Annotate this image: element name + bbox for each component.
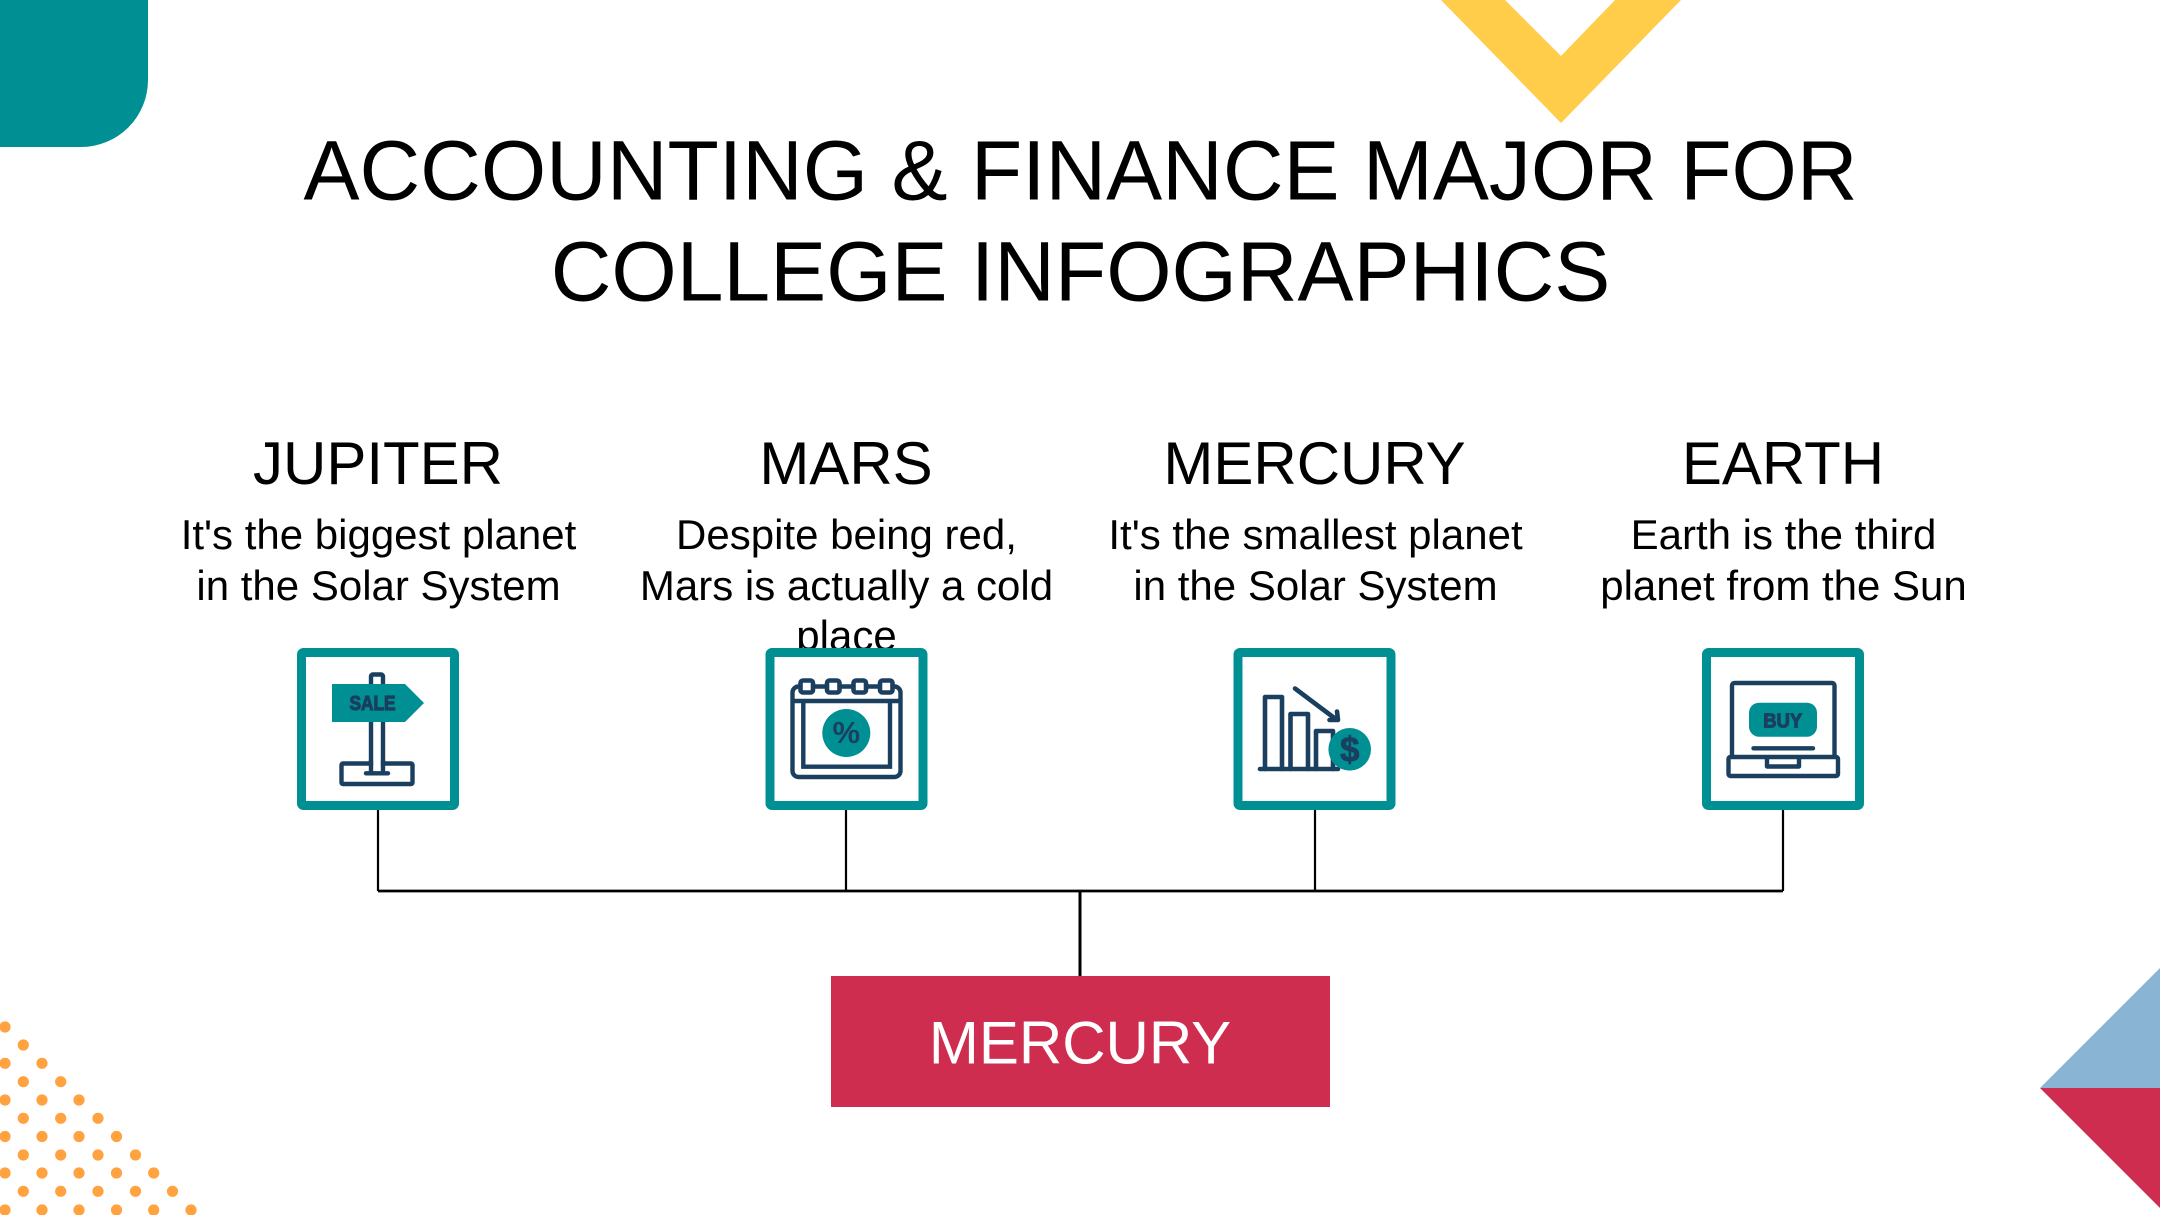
- decoration: orange dot triangle: [0, 1021, 197, 1215]
- text: Earth description: Earth is the third: [1631, 511, 1936, 558]
- icon: sale sign: SALE: [350, 693, 396, 715]
- text: Mercury description: [1108, 511, 1523, 609]
- icon: falling chart with dollar: [1238, 652, 1391, 806]
- heading: Jupiter: JUPITER: [253, 430, 503, 497]
- decoration: blue and red triangles: [2040, 968, 2160, 1208]
- panel: Jupiter: [181, 430, 577, 806]
- panel: Mars: [640, 430, 1053, 806]
- text: Jupiter description: It's the biggest planet: [181, 511, 577, 558]
- text: Mars description: place: [796, 612, 897, 659]
- icon: percent calendar: %: [833, 715, 860, 750]
- title: ACCOUNTING & FINANCE MAJOR FOR: [303, 124, 1858, 218]
- heading: Earth: EARTH: [1682, 430, 1884, 497]
- heading: Mercury: MERCURY: [1163, 430, 1466, 497]
- text: Mars description: Despite being red,: [676, 511, 1017, 558]
- text: Earth description: [1600, 511, 1967, 609]
- icon: falling chart with dollar: $: [1340, 730, 1359, 770]
- text: Mars description: Mars is actually a cold: [640, 562, 1053, 609]
- connector lines: [378, 808, 1783, 976]
- title: [303, 124, 1858, 318]
- panel: Mercury: [1108, 430, 1523, 806]
- decoration: yellow chevron: [1441, 0, 1681, 123]
- text: Mars description: [640, 511, 1053, 659]
- icon: laptop buy: BUY: [1763, 710, 1803, 732]
- text: Mercury description: It's the smallest planet: [1108, 511, 1523, 558]
- title: COLLEGE INFOGRAPHICS: [551, 224, 1610, 318]
- icon: laptop buy: [1706, 652, 1860, 806]
- text: Mercury description: in the Solar System: [1133, 562, 1498, 609]
- text: Jupiter description: in the Solar System: [196, 562, 561, 609]
- icon: sale sign: [302, 652, 454, 806]
- heading: Mars: MARS: [759, 430, 933, 497]
- decoration: teal rounded corner: [0, 0, 148, 147]
- text: Earth description: planet from the Sun: [1600, 562, 1967, 609]
- text: Jupiter description: [181, 511, 577, 609]
- callout: Mercury red box: MERCURY: [929, 1010, 1231, 1076]
- callout: Mercury red box: [831, 976, 1330, 1107]
- panel: Earth: [1600, 430, 1967, 806]
- icon: percent calendar: [770, 652, 923, 806]
